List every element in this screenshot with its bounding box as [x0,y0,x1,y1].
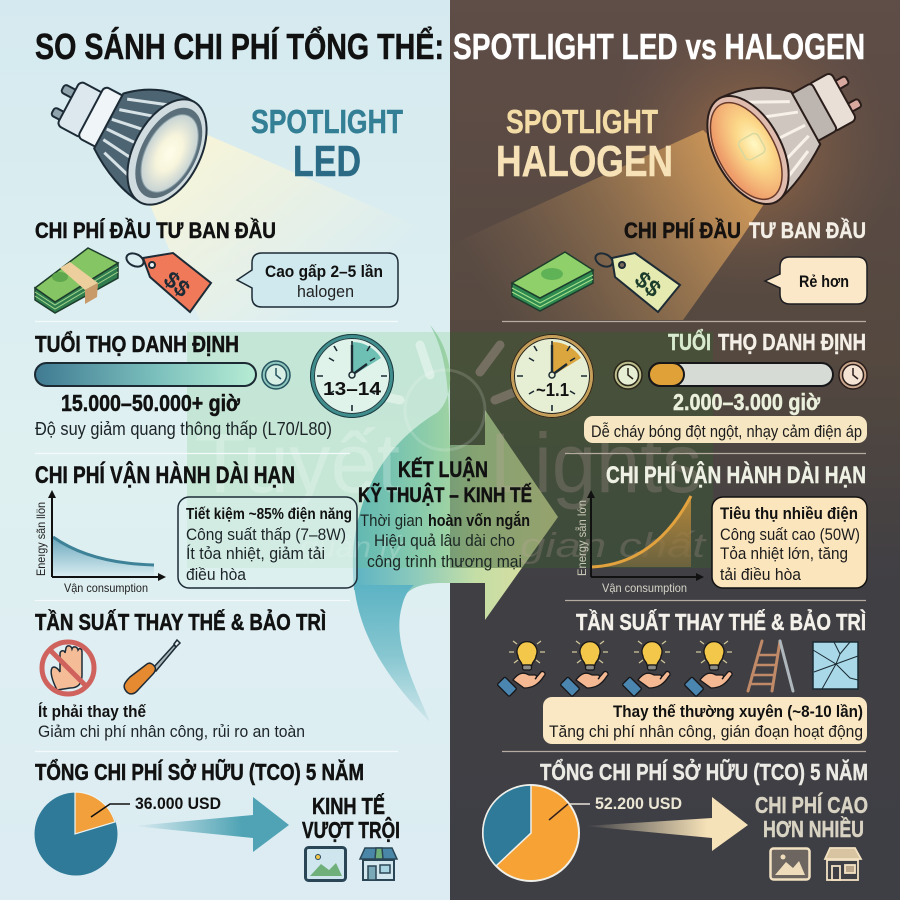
conclusion text: HƠN NHIỀU [763,815,864,842]
hours value: 2.000–3.000 giờ [673,389,821,415]
icon: ~1.1 year clock: ~1.1 [536,380,569,400]
line chart [574,490,704,595]
watermark: Tuyet Lights logo: Lights [490,416,702,510]
panel: LED initial cost [35,218,398,313]
callout: Cao gấp 2–5 lần [265,262,383,281]
text pill: Thay thế thường xuyên (~8-10 lần) [613,702,863,721]
callout box: điều hòa [186,565,246,584]
icon: no hand [42,642,94,694]
conclusion text: Thời gian [360,511,423,530]
heading: Spotlight LED [251,103,403,186]
conclusion text: Hiệu quả lâu dài cho [374,531,515,550]
callout: halogen [297,282,354,301]
heading: TUỔI [668,328,711,355]
icon: hand with bulb 1 [497,641,545,697]
heading: TƯ BAN ĐẦU [749,218,866,243]
panel: LED background [0,0,450,900]
icon: 13-14 year clock: 13–14 [323,379,381,399]
line chart: Vận consumption [602,581,687,595]
lifespan bar [649,363,833,386]
watermark: Tuyet Lights logo [195,345,707,565]
light beam: LED [150,133,450,320]
panel: halogen replacement [497,607,867,744]
glow: halogen [560,40,900,320]
icon: ladder [748,641,793,691]
icon: shop [360,848,397,880]
center swoosh and arrow [353,325,558,722]
watermark: Tuyet Lights logo: quản lý [300,531,405,564]
panel: halogen initial cost [512,218,867,312]
heading: TUỔI THỌ DANH ĐỊNH [35,330,239,357]
panel: halogen lifespan [510,328,867,443]
heading: TỔNG CHI PHÍ SỞ HỮU (TCO) 5 NĂM [35,757,364,785]
heading: Spotlight LED: LED [293,137,361,186]
icon: cash stack [512,252,593,311]
text [38,702,305,741]
panel: LED TCO [34,757,400,880]
note pill: Dễ cháy bóng đột ngột, nhạy cảm điện áp [591,422,862,441]
icon: picture [770,848,810,880]
title [35,24,865,67]
icon: price tag: $$ [159,266,195,302]
callout: Rẻ hơn [799,272,849,291]
value: 52.200 USD [595,794,682,813]
arrow [585,797,748,851]
text: Giảm chi phí nhân công, rủi ro an toàn [38,722,305,741]
title: SO SÁNH CHI PHÍ TỔNG THỂ: [35,24,444,67]
conclusion text: KẾT LUẬN [398,457,488,482]
heading: CHI PHÍ ĐẦU [624,218,741,243]
callout box: Công suất cao (50W) [720,525,860,544]
conclusion text: CHI PHÍ CAO [755,791,868,818]
callout box [178,497,357,588]
watermark: Tuyet Lights logo: Tuyết [195,416,400,510]
section dividers [35,322,866,752]
conclusion text: hoàn vốn ngắn [428,511,530,530]
icon: hand with bulb 4 [684,641,732,697]
callout box: Tiêu thụ nhiều điện [720,504,858,523]
icon: price tag: $$ [630,266,666,302]
heading: TẦN SUẤT THAY THẾ & BẢO TRÌ [35,607,326,635]
heading: Spotlight LED: SPOTLIGHT [251,103,403,140]
icon: ~1.1 year clock [510,334,594,418]
watermark overlay band [187,332,713,568]
heading: Spotlight Halogen [496,103,673,186]
callout box: Tỏa nhiệt lớn, tăng [720,544,848,563]
heading: CHI PHÍ VẬN HÀNH DÀI HẠN [35,461,295,489]
text pill: Tăng chi phí nhân công, gián đoạn hoạt động [549,722,863,741]
icon: broken glass [813,642,858,689]
icon: halogen spotlight [691,40,882,218]
conclusion text [302,792,400,843]
callout [765,257,867,304]
arrow [133,797,289,852]
callout box: Công suất thấp (7–8W) [186,525,346,544]
line chart: Eneıgy sãn llön [34,502,48,576]
icon: LED spotlight [33,44,223,218]
heading: Spotlight Halogen: SPOTLIGHT [506,103,658,140]
heading: CHI PHÍ ĐẦU TƯ BAN ĐẦU [35,218,276,243]
heading [624,218,866,243]
icon: 13-14 year clock [310,334,394,418]
callout box: Tiết kiệm ~85% điện năng [186,506,352,523]
icon: hand with bulb 2 [560,641,608,697]
heading [668,328,866,355]
watermark: Tuyet Lights logo: gian chất [520,527,707,565]
panel: halogen running cost [574,461,867,595]
conclusion text [358,457,532,571]
conclusion text: công trình thương mại [367,552,522,571]
text: Ít phải thay thế [38,702,146,721]
icon: price tag [124,251,211,312]
icon: picture [306,848,346,880]
panel: halogen TCO [483,757,868,881]
conclusion text: KỸ THUẬT – KINH TẾ [358,483,532,507]
value: 36.000 USD [135,794,221,813]
panel: halogen background [450,0,900,900]
callout box [712,497,867,588]
callout box: tải điều hòa [720,565,802,584]
callout box: Ít tỏa nhiệt, giảm tải [186,544,325,563]
icon: small clock end [839,361,867,389]
line chart: Vận consumption [64,581,148,595]
note: Độ suy giảm quang thông thấp (L70/L80) [35,419,332,439]
icon: cash stack [35,248,118,313]
line chart: Energy sẵn lớn [574,500,589,576]
panel: LED lifespan [35,330,394,439]
icon: price tag [593,251,680,312]
lifespan bar [35,363,256,386]
pie chart [34,792,130,876]
icon: small clock [262,361,290,389]
callout [237,253,398,307]
conclusion text: VƯỢT TRỘI [302,816,400,843]
hours value: 15.000–50.000+ giờ [61,390,241,416]
conclusion text [755,791,868,842]
conclusion text: KINH TẾ [312,792,385,819]
line chart [34,490,166,595]
pie chart [483,785,590,881]
heading: Spotlight Halogen: HALOGEN [496,137,673,186]
icon: screwdriver [124,640,180,694]
icon: hand with bulb 3 [622,641,670,697]
icon: shop [825,848,861,880]
text pill [543,697,867,744]
heading: THỌ DANH ĐỊNH [718,329,866,355]
panel: LED replacement [35,607,326,741]
icon: small clock start [614,361,642,389]
note pill [584,416,867,443]
light beam: halogen [450,130,770,320]
panel: LED running cost [34,461,357,595]
